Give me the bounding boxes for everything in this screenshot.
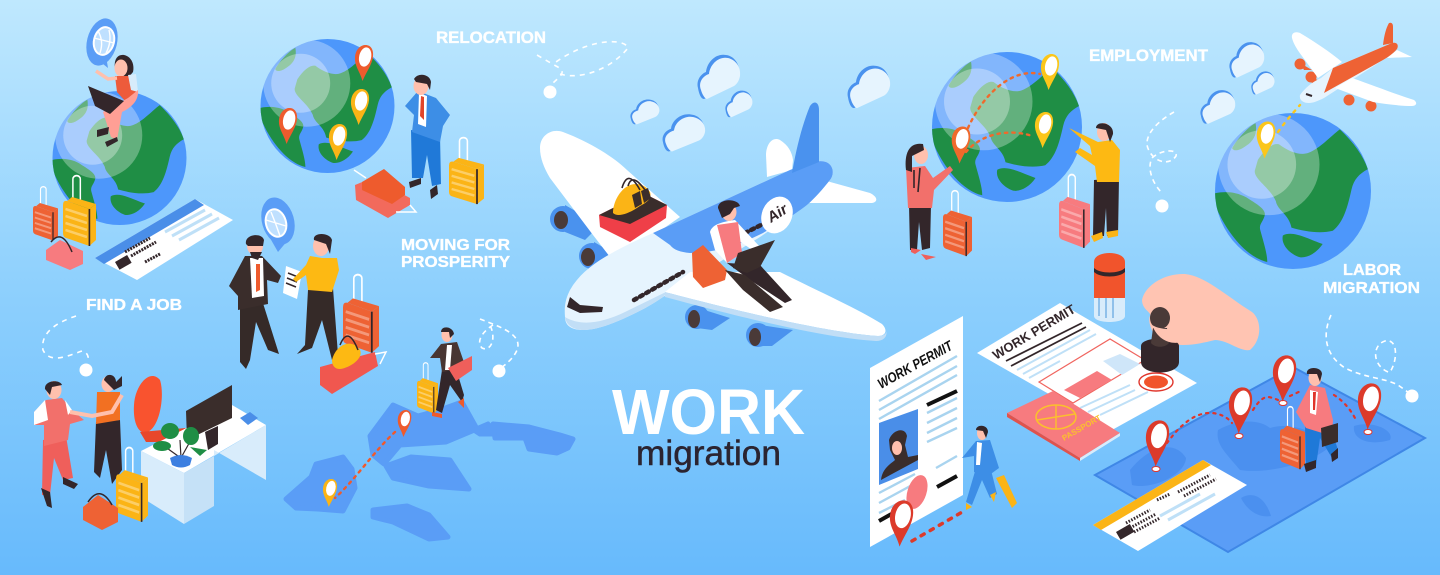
pink bag (46, 237, 83, 270)
speech bubble with globe icon (256, 194, 300, 252)
label: labor migration (1323, 262, 1420, 297)
traveller in coral jacket (1296, 368, 1338, 472)
orange airplane (1292, 23, 1416, 112)
dashed route: relocation (537, 42, 628, 98)
front wing (665, 272, 885, 336)
work permit sheet: WORK PERMIT (990, 301, 1078, 363)
clouds (630, 42, 1275, 151)
yellow boarding pass (1093, 460, 1247, 551)
potted plant (153, 423, 207, 468)
airline logo: Air (763, 200, 792, 227)
title: work migration: migration (636, 434, 781, 473)
desk (141, 405, 266, 524)
right stabilizer (797, 180, 876, 203)
speech bubble with globe icon (82, 15, 122, 69)
label: moving for prosperity (401, 237, 510, 271)
woman with laptop sitting on globe (88, 55, 138, 147)
orange suitcase (33, 187, 58, 240)
panel: moving for prosperity, two people with luggage (229, 194, 386, 394)
orange suitcase (1280, 407, 1305, 469)
panel: find a job, globe with woman (33, 15, 233, 280)
pink suitcase (1059, 175, 1090, 248)
panel: relocation, globe with pins and man (257, 39, 484, 218)
woman in yellow top (293, 234, 339, 360)
label: relocation: RELOCATION (436, 29, 546, 47)
red map pin (890, 500, 913, 547)
cockpit window (567, 297, 603, 313)
isometric continents (286, 402, 573, 539)
red suitcase with yellow bag (320, 336, 386, 394)
rear wing (540, 131, 680, 257)
orange suitcase (343, 275, 379, 353)
red passport: PASSPORT (1060, 413, 1103, 443)
red map pins (1146, 355, 1381, 472)
yellow suitcase (116, 448, 148, 522)
fuselage (565, 161, 833, 330)
woman pointing (906, 144, 953, 260)
stacked red suitcases (354, 169, 416, 218)
hand (1142, 274, 1259, 350)
panel: tall work permit with walking man (870, 316, 1017, 547)
red passport (1007, 391, 1120, 461)
isometric map sheet (1095, 367, 1425, 552)
orange bag (83, 494, 118, 530)
globe (49, 91, 187, 225)
walking man in blue (962, 426, 999, 510)
tail fin (792, 103, 819, 173)
work permit sheet (977, 301, 1197, 430)
label: moving for prosperity: MOVING FOR (401, 237, 510, 254)
label: moving for prosperity: PROSPERITY (401, 254, 510, 271)
label: labor migration: MIGRATION (1323, 280, 1420, 297)
woman handshake (70, 375, 122, 484)
map pin (1257, 122, 1275, 158)
panel: stamping a work permit (977, 253, 1259, 461)
yellow suitcase (996, 475, 1017, 508)
traveller with laptop (692, 200, 792, 312)
yellow suitcase (63, 176, 96, 246)
yellow suitcase (449, 138, 484, 204)
panel: find a job, office handshake (34, 375, 266, 530)
globe (1211, 113, 1371, 269)
central airplane with traveller (540, 103, 887, 347)
man pointing (1069, 123, 1120, 242)
map pins on globe (279, 45, 373, 160)
map continents (1130, 422, 1391, 516)
dashed route: employment (1147, 112, 1176, 212)
globe (257, 39, 394, 173)
man with beard in dark suit (229, 235, 281, 369)
ink bottle (1094, 253, 1125, 322)
red chair (134, 376, 186, 442)
yellow suitcase (417, 363, 438, 414)
dashed route: find a job (43, 316, 92, 376)
route dots (1167, 390, 1356, 443)
computer monitor (186, 385, 232, 450)
rubber stamp (1141, 307, 1186, 372)
route dots (335, 432, 395, 498)
title: work migration: WORK (612, 376, 805, 448)
rear engines (550, 205, 625, 270)
dashed route: labor migration (1326, 315, 1418, 402)
walking man (430, 327, 472, 418)
document (283, 266, 302, 299)
rear tail stabilizer (766, 139, 793, 177)
panel: map with pins and traveller (1093, 355, 1425, 552)
airline logo (755, 191, 799, 239)
front engines (685, 305, 793, 347)
label: find a job: FIND A JOB (86, 297, 182, 314)
panel: world map with route (286, 319, 573, 539)
route dots (912, 511, 964, 541)
work permit sheet (870, 316, 963, 547)
route dots (1278, 105, 1300, 132)
label: labor migration: LABOR (1343, 262, 1401, 279)
luggage on plane (599, 178, 667, 242)
globe (928, 52, 1082, 202)
dashed route with loop (480, 319, 518, 378)
orange suitcase (943, 191, 972, 256)
man in blue suit (405, 75, 450, 199)
boarding pass (95, 199, 233, 280)
label: employment: EMPLOYMENT (1089, 47, 1208, 65)
work permit sheet: WORK PERMIT (875, 337, 956, 392)
panel: labor migration, globe with orange airplane (1211, 23, 1416, 269)
man in red vest (34, 381, 84, 508)
passenger windows (634, 222, 767, 300)
map pins (323, 410, 411, 507)
panel: employment, globe with two people (906, 52, 1120, 260)
map pins (952, 54, 1059, 163)
route dots (966, 73, 1040, 152)
